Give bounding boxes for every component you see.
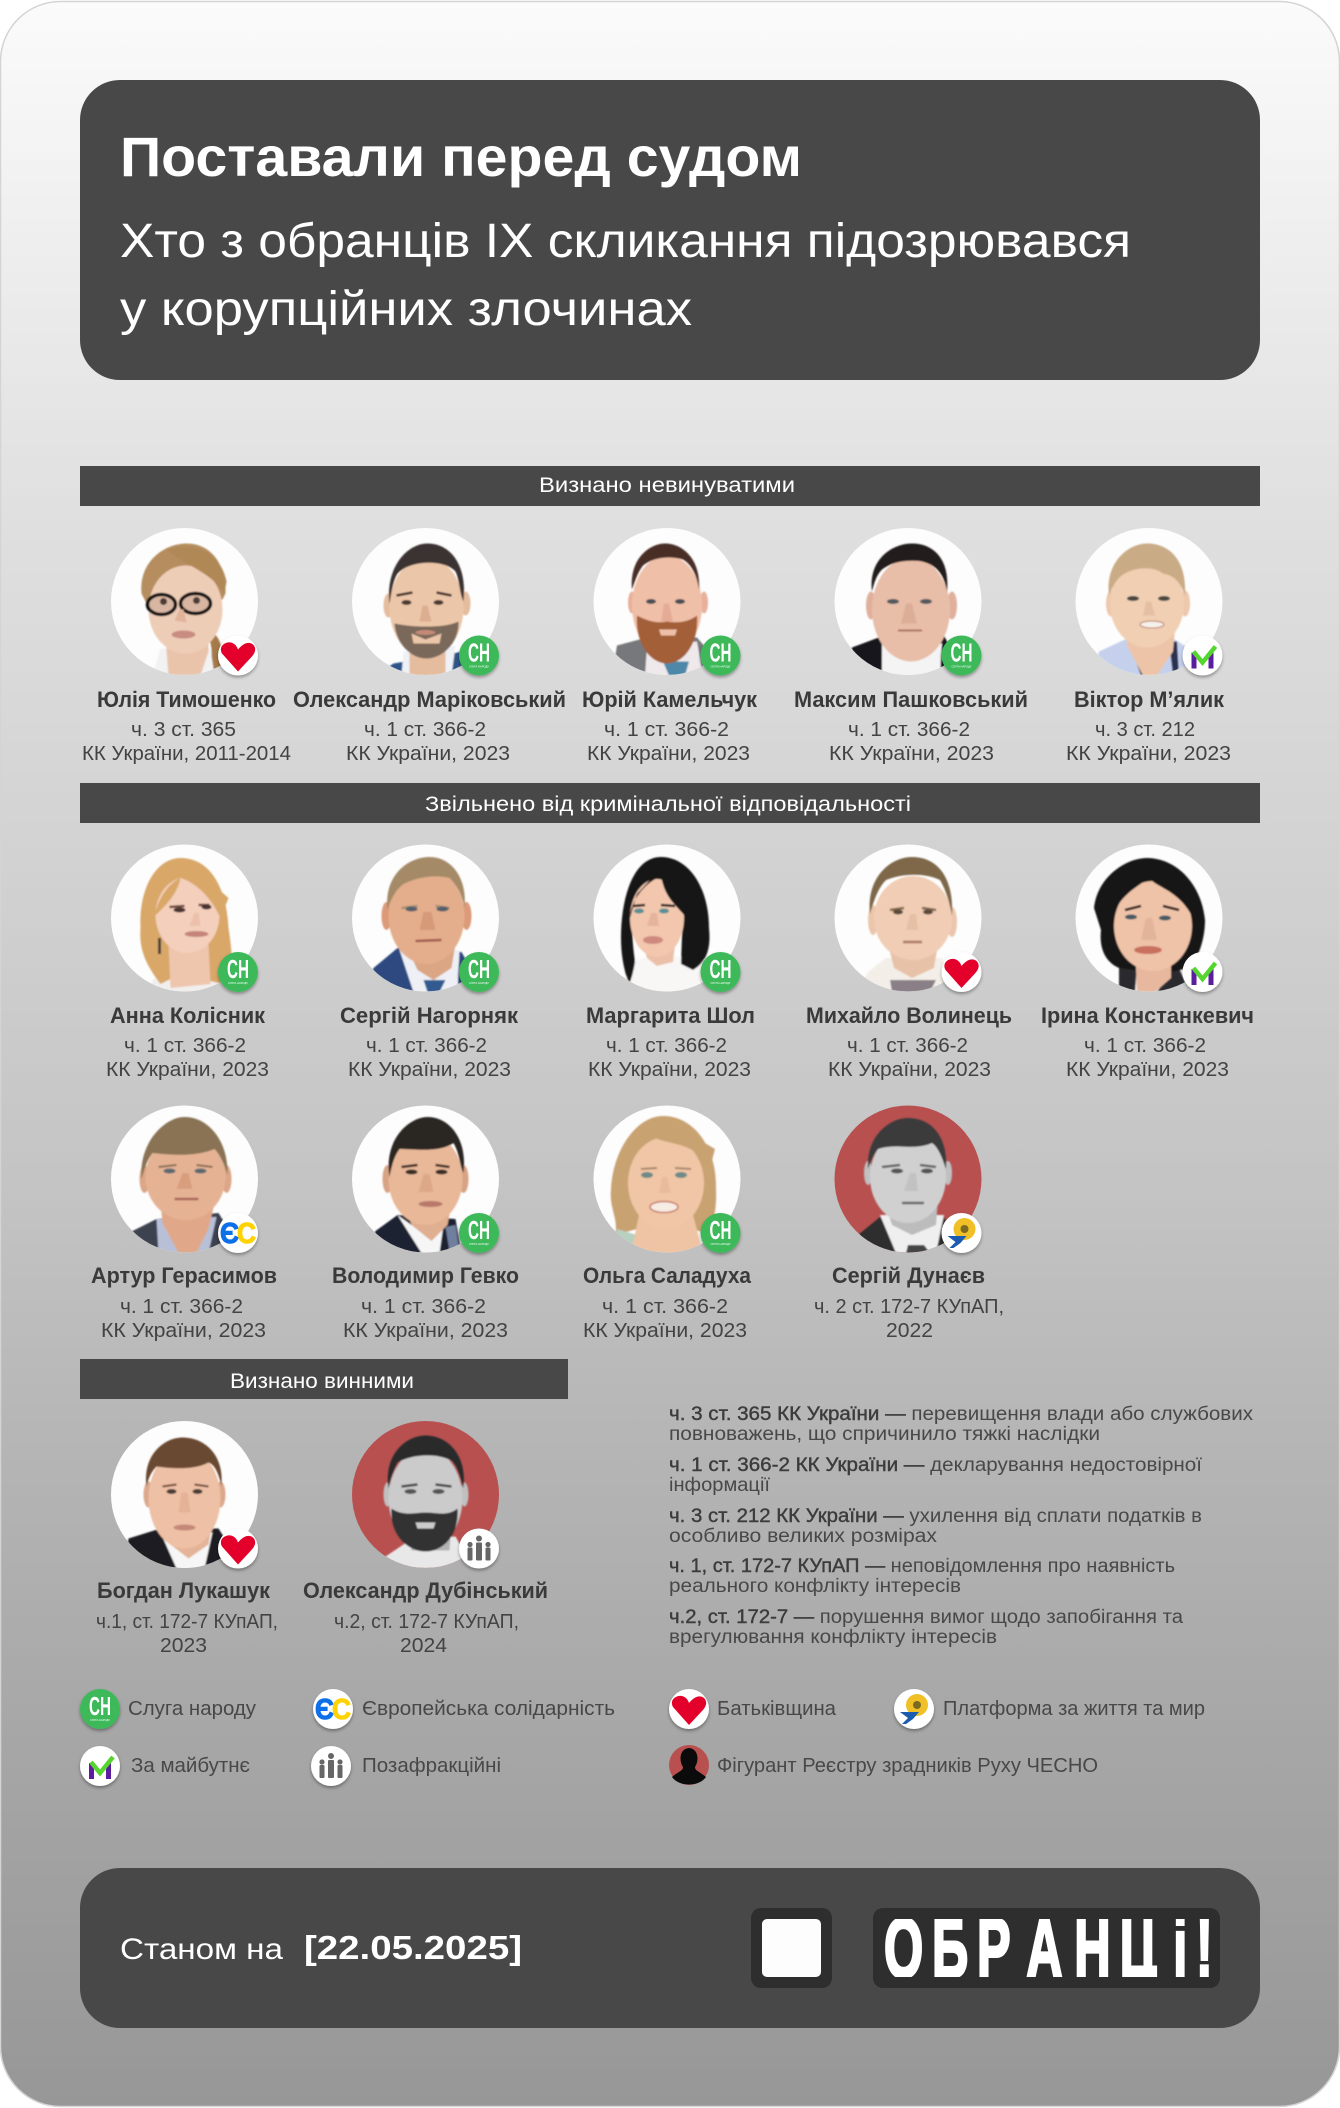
subtitle: у корупційних злочинах [120,283,692,336]
article: ч. 1 ст. 366-2 [361,1296,486,1318]
party badge: СН [468,1215,490,1245]
article: ч. 1 ст. 366-2 [120,1296,243,1318]
party badge: СЛУГА НАРОДУ [710,1242,731,1246]
date [120,1929,522,1966]
legal definitions text: врегулювання конфлікту інтересів [669,1627,997,1648]
name: Олександр Маріковський [293,687,566,712]
portrait [111,1421,258,1568]
portrait [111,528,258,676]
name: Юлія Тимошенко [97,687,276,712]
name: Юрій Камельчук [582,687,758,712]
article: КК України, 2023 [828,1059,991,1081]
article [101,1296,266,1342]
portrait [594,1106,740,1253]
article [583,1296,747,1342]
party badge [459,1213,499,1253]
legal definitions text: ч.2, ст. 172-7 — порушення вимог щодо запобігання та [669,1607,1183,1628]
article: КК України, 2023 [829,743,994,765]
portrait [594,528,740,676]
person: Kamelchuk [582,528,758,765]
name: Сергій Нагорняк [340,1003,519,1028]
person: Myalyk [1066,528,1231,765]
party badge [459,1528,499,1568]
section bar: found guilty [80,1359,568,1399]
article: ч. 1 ст. 366-2 [364,719,486,741]
name: Ольга Саладуха [583,1263,752,1288]
legal definitions text: повноважень, що спричинило тяжкі наслідки [669,1424,1100,1445]
section bar: released from liability [80,783,1260,823]
portrait [1076,844,1222,992]
person: Pashkovskyi [794,528,1028,765]
article [1066,1035,1229,1081]
name: Сергій Дунаєв [832,1263,985,1288]
party badge [218,1528,258,1568]
party badge: СЛУГА НАРОДУ [228,981,248,985]
article: КК України, 2023 [348,1059,511,1081]
portrait [352,1421,499,1568]
legend item: Batkivshchyna: Батьківщина [717,1698,837,1720]
person: Kolisnyk [106,844,269,1081]
party badge [459,636,499,676]
legend item: Registry of traitors [669,1745,1098,1785]
name: Віктор М’ялик [1074,687,1225,712]
party badge: СН [710,954,732,984]
party badge: СЛУГА НАРОДУ [469,664,489,668]
subtitle: Хто з обранців IX скликання підозрювався [120,215,1131,268]
legend item: European Solidarity: Європейська солідарність [362,1698,615,1720]
legend item: Servant of the People [80,1689,256,1729]
party badge: СН [227,954,249,984]
legend item: Platform for Life and Peace [894,1689,1205,1729]
article: КК України, 2023 [106,1059,269,1081]
title: Поставали перед судом [120,125,802,188]
logo square [751,1908,832,1988]
article: КК України, 2023 [583,1320,747,1342]
legend item: Servant of the People: СН [89,1691,111,1721]
article: ч. 1 ст. 366-2 [1084,1035,1206,1057]
person: Hevko [332,1106,519,1342]
person: Herasymov [91,1106,277,1342]
person: Volynets [806,844,1012,1081]
article: КК України, 2023 [1066,1059,1229,1081]
date: Станом на [120,1933,283,1966]
legend item: Registry of traitors: Фігурант Реєстру зрадників Руху ЧЕСНО [717,1755,1098,1777]
person: Dunaiev [814,1106,1004,1342]
legend item: European Solidarity: С [332,1694,351,1726]
party badge [700,1213,740,1253]
name: Ірина Констанкевич [1041,1003,1254,1028]
article [1066,719,1231,765]
portrait [352,1106,499,1253]
legend item: European Solidarity [313,1689,615,1729]
name: Олександр Дубінський [303,1578,548,1603]
portrait [352,844,499,992]
article: ч.2, ст. 172-7 КУпАП, [334,1611,519,1633]
party badge: СН [468,954,490,984]
legal definitions text [669,1404,1254,1648]
article: ч. 3 ст. 212 [1095,719,1195,741]
article: ч. 1 ст. 366-2 [604,719,729,741]
name: Маргарита Шол [586,1003,755,1028]
article: КК України, 2023 [346,743,510,765]
article [828,1035,991,1081]
name: Анна Колісник [110,1003,266,1028]
person: Shol [586,844,755,1081]
person: Dubinskyi [303,1421,548,1657]
article [588,1035,751,1081]
name: Михайло Волинець [806,1003,1012,1028]
article [106,1035,269,1081]
party badge: СН [468,638,490,668]
legend item: Non-affiliated [311,1746,501,1786]
legend item: Batkivshchyna [669,1689,837,1729]
article: 2022 [886,1320,933,1342]
legend item: Non-affiliated: Позафракційні [362,1755,501,1777]
article: ч. 2 ст. 172-7 КУпАП, [814,1296,1004,1318]
name: Максим Пашковський [794,687,1028,712]
article: 2023 [160,1635,207,1657]
section bar: released from liability: Звільнено від кримінальної відповідальності [425,793,911,816]
legend item: For the Future: За майбутнє [131,1755,250,1777]
article: КК України, 2023 [588,1059,751,1081]
name: Володимир Гевко [332,1263,519,1288]
party badge [700,636,740,676]
legend item: For the Future [80,1746,250,1786]
article [346,719,510,765]
portrait [834,528,982,676]
section bar: acquitted: Визнано невинуватими [539,474,795,497]
portrait [111,1106,258,1253]
article: ч. 3 ст. 365 [131,719,236,741]
legal definitions text: ч. 3 ст. 212 КК України — ухилення від сплати податків в [669,1506,1202,1527]
legal definitions text: ч. 1 ст. 366-2 КК України — декларування недостовірної [669,1455,1203,1476]
person: Nahorniak [340,844,519,1081]
party badge [700,952,740,992]
article [348,1035,511,1081]
legal definitions text: інформації [669,1475,771,1496]
article: КК України, 2023 [343,1320,508,1342]
article [334,1611,519,1657]
legal definitions text: особливо великих розмірах [669,1526,938,1547]
party badge: СЛУГА НАРОДУ [710,664,731,668]
party badge [942,952,982,992]
party badge: СН [710,638,732,668]
article: ч. 1 ст. 366-2 [848,719,970,741]
legal definitions text: ч. 1, ст. 172-7 КУпАП — неповідомлення про наявність [669,1556,1175,1577]
article: ч.1, ст. 172-7 КУпАП, [96,1611,278,1633]
party badge [459,952,499,992]
article: КК України, 2023 [101,1320,266,1342]
article: ч. 1 ст. 366-2 [602,1296,728,1318]
legend item: Servant of the People: СЛУГА НАРОДУ [90,1718,110,1722]
portrait [834,844,982,992]
article: КК України, 2023 [587,743,750,765]
name: Богдан Лукашук [97,1578,271,1603]
portrait [352,528,499,678]
party badge [218,952,258,992]
party badge [1182,952,1222,992]
party badge [942,636,982,676]
legal definitions text: ч. 3 ст. 365 КК України — перевищення влади або службових [669,1404,1254,1425]
party badge [218,636,258,676]
party badge: Є [220,1218,239,1250]
article [82,719,291,765]
legend item: European Solidarity: Є [315,1694,334,1726]
article: КК України, 2011-2014 [82,743,291,765]
legend item: Platform for Life and Peace: Платформа за життя та мир [943,1698,1205,1720]
party badge: СЛУГА НАРОДУ [469,1242,489,1246]
date: [22.05.2025] [304,1929,522,1966]
person: Marikovskyi [293,528,566,765]
person: Konstankevych [1041,844,1254,1081]
party badge [218,1213,258,1253]
party badge: СН [950,638,972,668]
article: ч. 1 ст. 366-2 [366,1035,487,1057]
name: Артур Герасимов [91,1263,277,1288]
party badge: СЛУГА НАРОДУ [710,981,731,985]
article: ч. 1 ст. 366-2 [606,1035,727,1057]
article: ч. 1 ст. 366-2 [124,1035,246,1057]
article [814,1296,1004,1342]
legal definitions text: реального конфлікту інтересів [669,1576,961,1597]
article [96,1611,278,1657]
portrait [594,844,740,992]
logo wordmark: ОБРАНЦі! [884,1901,1213,1995]
article: 2024 [400,1635,447,1657]
section bar: found guilty: Визнано винними [230,1370,414,1393]
article [587,719,750,765]
person: Lukashuk [96,1421,278,1657]
article [829,719,994,765]
portrait [834,1106,982,1253]
article: КК України, 2023 [1066,743,1231,765]
party badge: С [237,1218,256,1250]
person: Tymoshenko [82,528,291,765]
party badge: СЛУГА НАРОДУ [469,981,489,985]
party badge: СН [710,1215,732,1245]
portrait [111,844,258,992]
subtitle [120,215,1131,336]
portrait [1076,528,1222,676]
section bar: acquitted [80,466,1260,506]
person: Saladukha [583,1106,752,1342]
header panel [80,80,1260,380]
legend item: Servant of the People: Слуга народу [128,1698,256,1720]
party badge: СЛУГА НАРОДУ [952,664,972,668]
footer panel [80,1868,1260,2028]
party badge [1182,636,1222,676]
article: ч. 1 ст. 366-2 [847,1035,968,1057]
party badge [942,1213,982,1253]
legend [80,1689,1205,1786]
article [343,1296,508,1342]
